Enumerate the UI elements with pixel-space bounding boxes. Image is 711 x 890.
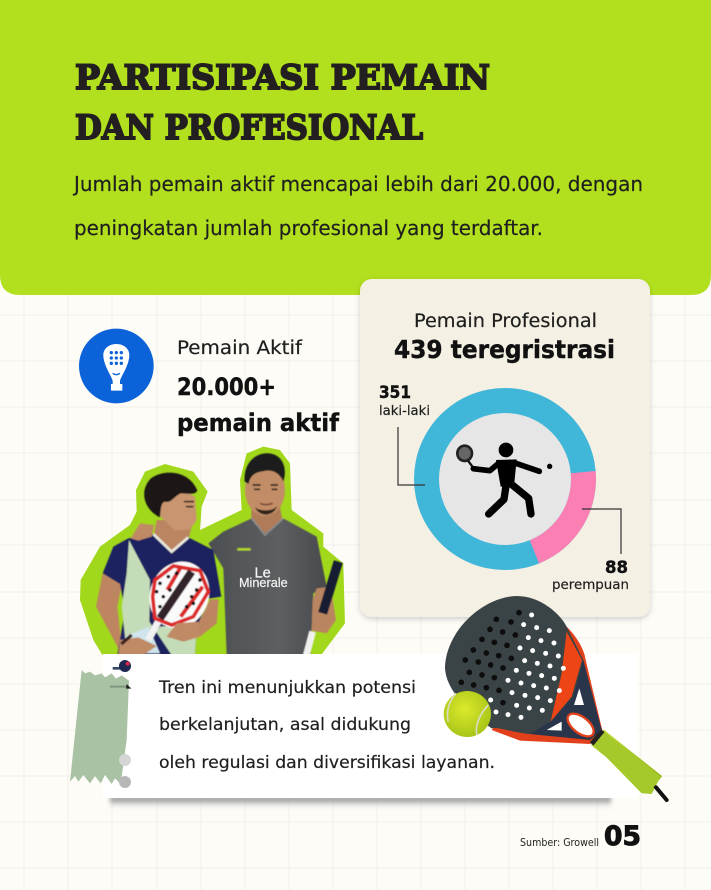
title: PARTISIPASI PEMAIN [75,58,490,98]
photo: two players with green cut-out outline [80,447,345,657]
callout: female count: perempuan [552,577,629,593]
callout: male count: laki-laki [379,403,430,419]
panel heading [394,311,615,364]
note text: berkelanjutan, asal didukung [159,715,411,734]
callout: female count [552,509,629,593]
donut chart [414,388,596,570]
active players text: pemain aktif [177,409,340,437]
panel heading: 439 teregristrasi [394,335,615,364]
icon: padel racket in blue circle [79,329,154,403]
callout: male count: 351 [379,383,411,403]
tape and pin decoration [70,660,131,788]
note text: oleh regulasi dan diversifikasi layanan. [159,753,495,772]
title: DAN PROFESIONAL [75,108,423,148]
active players text: Pemain Aktif [177,338,303,359]
active players text: 20.000+ [177,373,276,401]
intro text [72,172,643,240]
callout: female count: 88 [605,558,628,578]
note text [158,678,495,772]
shirt logo [240,567,288,588]
callout: male count [379,383,430,485]
icon: padel player silhouette [456,443,552,514]
panel: professional players [360,279,650,617]
active players text [177,338,340,437]
page number: 05 [604,821,641,852]
intro text: peningkatan jumlah profesional yang terdaftar. [74,216,543,240]
title [75,58,490,148]
source label: Sumber: Growell [520,837,599,849]
right player [208,453,338,657]
header panel [0,0,711,295]
shirt logo: Minerale [239,575,288,590]
intro text: Jumlah pemain aktif mencapai lebih dari 20.000, dengan [72,172,643,196]
panel heading: Pemain Profesional [414,311,597,332]
shirt logo: Le [254,565,271,581]
note card [103,654,638,807]
note text: Tren ini menunjukkan potensi [158,678,416,697]
left player [96,473,221,657]
padel racket and ball illustration [444,596,667,800]
paddle held by left player [146,560,212,642]
